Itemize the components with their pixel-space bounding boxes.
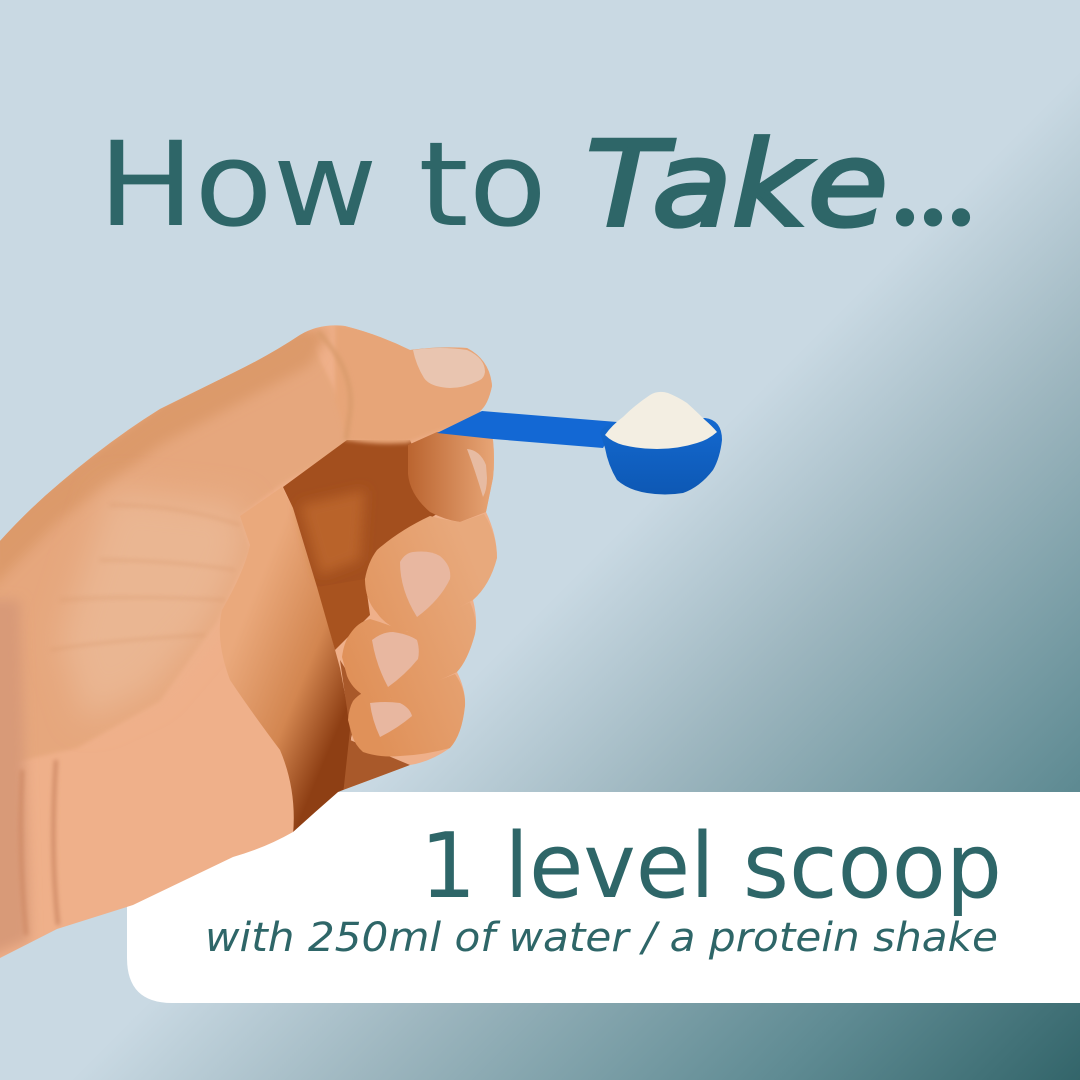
wrinkle lines [50, 505, 240, 650]
finger heel fold [220, 487, 352, 835]
thumbnail [413, 348, 485, 388]
little finger [348, 674, 465, 756]
ring finger [342, 602, 476, 699]
knuckle highlight [300, 490, 365, 575]
index fingernail [467, 449, 487, 497]
icon: hand holding scoop [0, 320, 500, 970]
middle finger [365, 514, 497, 632]
thumb joint crease [323, 337, 352, 442]
lower right shadow [340, 660, 410, 795]
thumb metacarpal area [0, 320, 360, 770]
index finger [408, 432, 500, 522]
dosage subtext: with 250ml of water / a protein shake [205, 915, 998, 961]
wrinkled thumb base [60, 490, 245, 720]
panel: dosage [127, 792, 1080, 1003]
title: How to [98, 116, 547, 253]
back of hand edge shading [0, 328, 330, 590]
palm base [0, 320, 500, 970]
thumb [335, 324, 500, 444]
middle fingernail [400, 552, 450, 617]
title: ... [891, 126, 975, 250]
ring fingernail [372, 632, 419, 687]
wrist crease [21, 760, 58, 935]
lower finger shadow [317, 579, 370, 650]
dosage heading: 1 level scoop [420, 814, 1002, 919]
scoop handle [437, 411, 617, 448]
powder [605, 392, 717, 449]
scoop bowl [600, 418, 722, 494]
title [98, 116, 975, 253]
icon: blue scoop with powder [437, 392, 722, 494]
little fingernail [370, 702, 412, 737]
title: Take [586, 116, 888, 253]
left wrist shading [0, 600, 30, 960]
curled fingers in shadow [283, 440, 440, 587]
